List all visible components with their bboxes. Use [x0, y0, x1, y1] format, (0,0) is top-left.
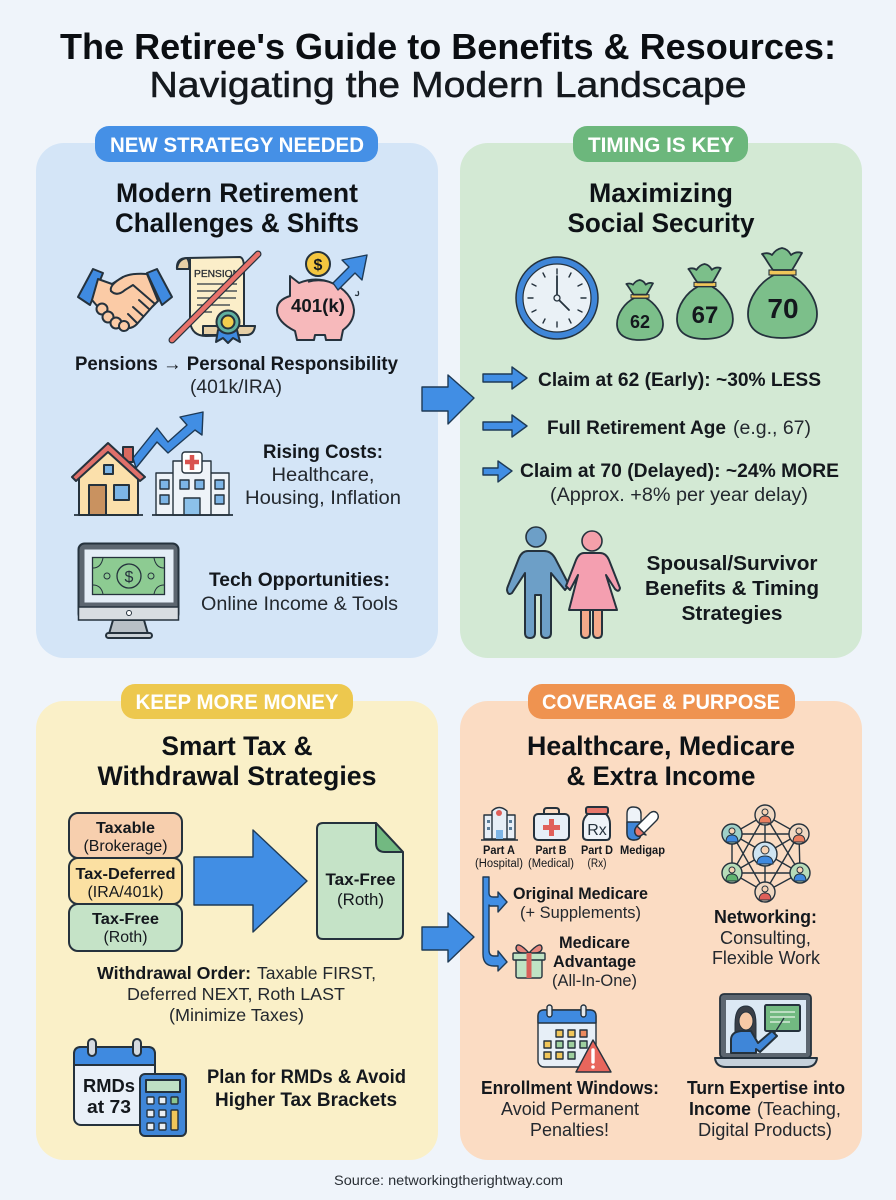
icon: clock — [516, 257, 598, 339]
text: claim at 70: Claim at 70 (Delayed): ~24% MORE — [520, 461, 839, 482]
badge: coverage and purpose: COVERAGE & PURPOSE — [542, 691, 780, 714]
text: claim at 62: Claim at 62 (Early): ~30% LESS — [538, 370, 821, 391]
diagram: account stack: (Roth) — [104, 929, 148, 946]
text: claim at 70 — [520, 461, 839, 506]
text: medicare part labels: Part A — [483, 845, 515, 857]
text: medicare part labels: (Rx) — [588, 858, 607, 870]
text: medicare part labels — [475, 845, 665, 870]
title: Navigating the Modern Landscape — [150, 64, 746, 105]
diagram: account stack: Tax-Free — [92, 911, 159, 928]
icon: monitor with money: $ — [125, 569, 134, 586]
icon: pension scroll crossed out — [172, 254, 258, 343]
text: medicare part labels: Part B — [536, 845, 566, 857]
heading: maximizing social security: Social Security — [568, 208, 754, 238]
arrow: claim at 70 — [483, 461, 512, 482]
badge: new strategy needed: NEW STRATEGY NEEDED — [110, 134, 364, 157]
text: spousal and survivor benefits: Strategies — [682, 603, 782, 625]
arrow: claim at 62 — [483, 367, 527, 389]
badge: coverage and purpose — [528, 684, 795, 719]
icon: hospital — [152, 452, 233, 515]
heading: modern retirement — [115, 178, 359, 238]
text: rising costs: Rising Costs: — [263, 442, 383, 463]
heading: healthcare, medicare: Healthcare, Medicare — [527, 731, 795, 761]
heading: smart tax — [98, 731, 376, 791]
text: original medicare: Original Medicare — [513, 884, 648, 903]
text: pensions to personal responsibility: Pensions → Personal Responsibility — [75, 354, 398, 375]
icon: RMD calendar and calculator: RMDs — [83, 1076, 135, 1096]
text: medicare part labels: Part D — [581, 845, 613, 857]
heading: modern retirement: Challenges & Shifts — [115, 208, 359, 238]
badge: new strategy needed — [95, 126, 378, 162]
text: plan for RMDs: Higher Tax Brackets — [215, 1090, 397, 1111]
text: withdrawal order: Deferred NEXT, Roth LAST — [127, 984, 345, 1004]
text: networking: Networking: — [714, 907, 817, 927]
text: turn expertise into income: Digital Products) — [698, 1120, 832, 1140]
icon: money bag 62 — [617, 280, 663, 340]
text: networking: Flexible Work — [712, 948, 821, 968]
text: enrollment windows: Enrollment Windows: — [481, 1078, 659, 1098]
text: claim at 70: (Approx. +8% per year delay) — [550, 485, 808, 506]
source line: Source: networkingtherightway.com — [334, 1172, 563, 1188]
icon: money bag 67: 67 — [692, 302, 718, 329]
icon: part A hospital — [481, 808, 518, 840]
text: spousal and survivor benefits: Spousal/Survivor — [646, 553, 818, 575]
heading: smart tax: Withdrawal Strategies — [98, 761, 376, 791]
text: turn expertise into income: Income — [689, 1099, 751, 1119]
heading: maximizing social security: Maximizing — [589, 178, 733, 208]
heading: healthcare, medicare: & Extra Income — [566, 761, 756, 791]
text: medicare part labels: Medigap — [620, 845, 665, 857]
text: pensions to personal responsibility — [75, 354, 398, 398]
panel: healthcare, medicare and extra income — [460, 684, 862, 1160]
panel: maximizing social security — [460, 126, 862, 658]
text: withdrawal order: Withdrawal Order: — [97, 963, 251, 983]
text: medicare advantage: Advantage — [553, 952, 636, 971]
text: medicare part labels: (Medical) — [528, 858, 574, 870]
icon: part B medical kit — [534, 808, 569, 840]
diagram: account stack: (Brokerage) — [84, 838, 168, 855]
icon: piggy bank 401k: $ — [314, 257, 323, 274]
icon: enrollment calendar with warning — [538, 1005, 611, 1072]
diagram: account stack — [69, 813, 182, 951]
text: turn expertise into income: (Teaching, — [757, 1099, 841, 1119]
text: networking — [712, 907, 821, 968]
diagram: account stack: Tax-Deferred — [76, 866, 176, 883]
icon: piggy bank 401k — [277, 252, 367, 340]
text: tech opportunities: Online Income & Tools — [201, 594, 398, 615]
icon: part D prescription bottle — [583, 807, 610, 840]
text: original medicare — [513, 884, 648, 922]
text: medicare advantage: Medicare — [559, 933, 630, 952]
badge: timing is key: TIMING IS KEY — [588, 134, 734, 157]
text: plan for RMDs — [207, 1067, 406, 1111]
text: turn expertise into income: Turn Expertise into — [687, 1078, 845, 1098]
icon: money bag 67 — [677, 264, 733, 339]
arrow: bottom panels connector — [422, 913, 474, 962]
text: rising costs: Healthcare, — [272, 465, 374, 486]
heading: modern retirement: Modern Retirement — [116, 178, 358, 208]
badge: keep more money: KEEP MORE MONEY — [136, 691, 338, 714]
icon: money bag 62: 62 — [630, 312, 650, 332]
text: tech opportunities — [201, 570, 398, 615]
text: enrollment windows: Penalties! — [530, 1120, 609, 1140]
icon: couple — [507, 527, 620, 638]
arrow: top panels connector — [422, 375, 474, 424]
icon: network — [722, 805, 810, 902]
text: spousal and survivor benefits: Benefits & Timing — [645, 578, 819, 600]
text: full retirement age: Full Retirement Age — [547, 418, 726, 439]
arrow: medicare branches — [483, 877, 507, 971]
icon: tax-free document: Tax-Free — [326, 870, 396, 889]
icon: piggy bank 401k: 401(k) — [291, 296, 345, 316]
text: original medicare: (+ Supplements) — [520, 903, 641, 922]
icon: laptop teaching — [715, 994, 817, 1067]
title — [60, 26, 836, 105]
text: enrollment windows — [481, 1078, 659, 1140]
text: plan for RMDs: Plan for RMDs & Avoid — [207, 1067, 406, 1088]
icon: handshake — [78, 269, 172, 331]
icon: part D prescription bottle: Rx — [587, 822, 607, 839]
arrow: stack to tax-free — [194, 830, 307, 932]
text: spousal and survivor benefits — [645, 553, 819, 625]
title: The Retiree's Guide to Benefits & Resources: — [60, 26, 836, 67]
diagram: account stack: (IRA/401k) — [88, 884, 164, 901]
icon: gift — [513, 945, 545, 978]
badge: timing is key — [573, 126, 748, 162]
text: withdrawal order: Taxable FIRST, — [257, 963, 376, 983]
text: tech opportunities: Tech Opportunities: — [209, 570, 390, 591]
text: rising costs: Housing, Inflation — [245, 488, 401, 509]
panel: smart tax and withdrawal strategies — [36, 684, 438, 1160]
text: medicare advantage — [552, 933, 637, 990]
heading: healthcare, medicare — [527, 731, 795, 791]
heading: maximizing social security — [568, 178, 754, 238]
icon: pension scroll crossed out: PENSION — [194, 268, 240, 280]
text: rising costs — [245, 442, 401, 509]
text: networking: Consulting, — [720, 928, 811, 948]
icon: medigap pills — [627, 807, 658, 840]
text: medicare advantage: (All-In-One) — [552, 971, 637, 990]
icon: money bag 70 — [748, 248, 817, 338]
text: turn expertise into income — [687, 1078, 845, 1140]
icon: money bag 70: 70 — [767, 293, 799, 324]
text: medicare part labels: (Hospital) — [475, 858, 523, 870]
icon: tax-free document — [317, 823, 403, 939]
icon: RMD calendar and calculator — [74, 1039, 186, 1136]
diagram: account stack: Taxable — [96, 820, 155, 837]
icon: monitor with money — [78, 544, 178, 638]
arrow: full retirement age — [483, 415, 527, 437]
badge: keep more money — [121, 684, 353, 719]
text: pensions to personal responsibility: (401k/IRA) — [190, 377, 282, 398]
icon: RMD calendar and calculator: at 73 — [87, 1097, 131, 1117]
icon: house with rising arrow — [72, 412, 203, 515]
text: enrollment windows: Avoid Permanent — [501, 1099, 639, 1119]
text: full retirement age: (e.g., 67) — [733, 418, 811, 439]
text: full retirement age — [547, 418, 811, 439]
text: withdrawal order — [97, 963, 376, 1025]
heading: smart tax: Smart Tax & — [162, 731, 312, 761]
icon: tax-free document: (Roth) — [337, 890, 384, 909]
text: withdrawal order: (Minimize Taxes) — [169, 1005, 304, 1025]
panel: modern retirement challenges — [36, 126, 438, 658]
